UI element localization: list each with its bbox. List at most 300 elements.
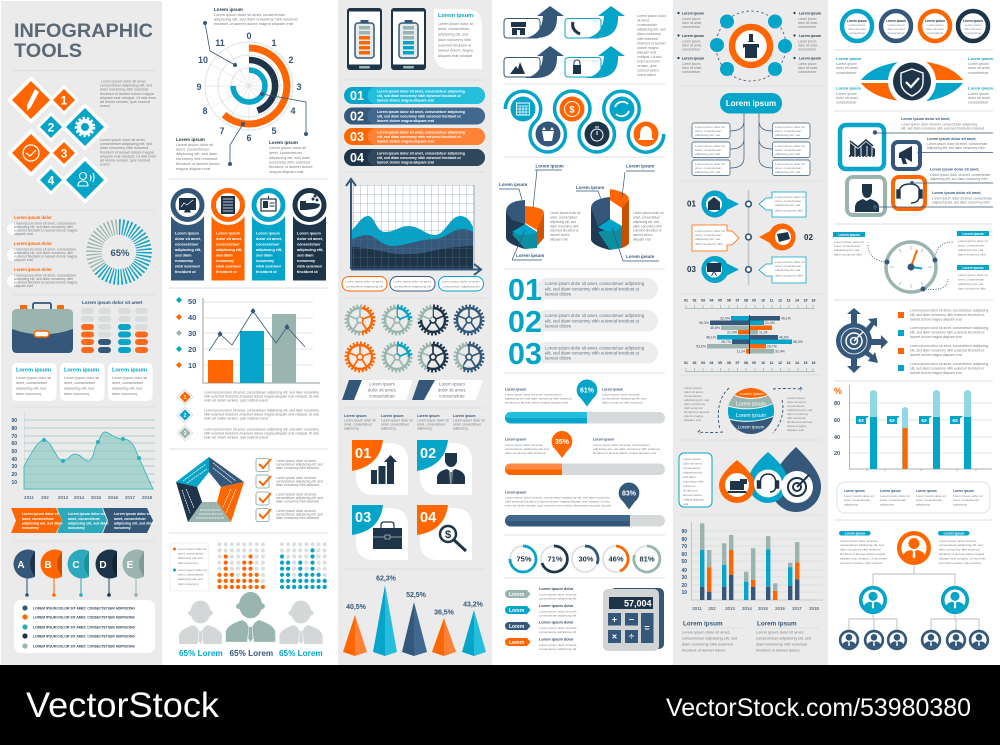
org chart: Lorem ipsum [845,532,865,536]
chevrons: Lorem ipsum dolor sit [114,512,152,516]
stacked bar chart: 2015 [758,606,768,611]
bullet lists: consectetuer [798,25,817,29]
stacked bar chart: 2016 [775,606,785,611]
white cards: Lorem ipsum [64,368,99,374]
diverging bars: 05 [718,298,722,302]
text rings: consectetuer [965,31,981,35]
text rings: consectetuer [888,31,904,35]
checklist: consectetuer adipiscing elit, sed [276,496,323,500]
progress rows: diam nonummy nibh euismod [602,400,643,404]
pie labels: laoreet dolore [550,233,570,237]
chevrons: amet, consectetuer [22,517,55,521]
tree diagram: amet, consectetuer [775,129,801,133]
footer band [0,665,1000,745]
diverging bars: 13 [787,298,790,302]
caption card: Lorem ipsum dolor sit [880,494,910,498]
target compass: laoreet dolore magna aliquam erat [910,371,962,375]
note card: aliquam erat volutpat [438,54,472,58]
people: 65% Lorem [230,649,273,658]
org chart [839,531,988,649]
icon: document [221,196,235,214]
two captions: diam nonummy nibh euismod [682,642,733,646]
panel: column 4 [499,6,667,651]
diverging bars: 14 [795,361,799,365]
growth arrows: volutpat. Ut wisi [637,55,662,59]
list: orange headings: adipiscing elit, sed diam nonummy nibh [14,277,73,281]
timeline steps: Lorem ipsum dolor sit [775,260,805,264]
segmented sphere: tincidunt ut laoreet [684,410,709,414]
dot legend card [170,543,209,591]
pie labels: aliquam erat [550,238,568,242]
white cards: Lorem ipsum dolor sit [64,376,99,380]
icon: headset [897,184,922,203]
radar captions: nonummy nibh euismod [269,160,310,164]
bar and line chart: 50 [188,297,196,306]
org chart: consectetuer adipiscing elit, sed [840,543,884,547]
note card: euismod tincidunt ut [438,44,471,48]
text rings: Lorem ipsum [963,19,983,23]
radar chart: 9 [196,82,202,92]
calculator: × [612,632,617,642]
caption card: adipiscing [844,502,858,506]
four icon cards: Lorem ipsum [297,232,321,236]
diverging bars: 06 [727,298,731,302]
icon: shield [901,69,923,96]
white cards [12,363,152,401]
progress rows: Lorem ipsum [505,388,526,392]
progress rows [505,380,665,526]
white cards: amet, consectetuer [64,381,96,385]
tree diagram: adipiscing elit, sed [775,170,801,174]
four column text: adipiscing [381,426,396,430]
radar captions: Lorem ipsum [176,137,205,142]
panel: column 1: tincidunt ut laoreet dolore magna [100,150,155,154]
numbered list: enim ad minim veniam, quis nostrud exerci [204,436,269,440]
area chart: 2015 [91,495,102,500]
diverging bars: 02 [693,298,696,302]
text rings: Lorem ipsum [927,23,944,27]
timeline steps: 01 [687,200,696,208]
pie labels: Lorem ipsum dolor sit [633,211,664,215]
numbered list: Lorem ipsum dolor sit amet, consectetuer adipiscing elit, sed diam nonummy [204,390,319,394]
eye shield: consectetuer [968,100,989,104]
text rings: dolor sit amet [887,27,905,31]
gears [346,306,483,371]
letter pins A-E: A [17,560,25,571]
two captions: tincidunt ut laoreet dolore [682,648,726,652]
numbered list: Lorem ipsum dolor sit amet, consectetuer adipiscing elit, sed diam nonummy [204,408,319,412]
icon: gear [76,118,94,136]
growth arrows: diam nonummy [637,32,661,36]
radial chart 65% [94,227,144,277]
3D pie left [506,200,544,249]
drops with icons: dolor sit amet, [683,462,703,466]
radar chart: 5 [271,126,277,136]
numbered pills: 02 [350,110,364,124]
icon squares: Lorem ipsum dolor sit amet, consectetuer adipiscing [901,122,977,126]
progress rows: Lorem ipsum dolor sit amet, consectetuer adipiscing elit, sed diam nonummy [505,496,610,500]
tag list: consectetuer adipiscing elit. [539,630,577,634]
chevrons: nonummy [114,526,131,530]
icon: megaphone [899,146,912,164]
clock: diam nonummy nibh [834,252,862,256]
diverging bars: 21,4% [765,321,775,325]
slanted tags: dolor sit amet, [368,388,396,392]
eye shield: Lorem ipsum [968,86,994,90]
four column text: adipiscing [417,426,432,430]
timeline steps: amet, consectetuer [695,233,721,237]
progress rows: consectetuer adipiscing elit, sed [602,396,646,400]
stacked bar chart: 20 [681,583,687,589]
diverging bars: 46,1% [781,316,791,320]
tree diagram: Lorem ipsum dolor sit [775,125,805,129]
icon squares: Lorem ipsum dolor sit amet, consectetuer [932,196,993,200]
phones with batteries [347,8,426,70]
target compass: elit, sed diam nonummy nibh euismod tincidunt ut [910,313,984,317]
bar and line chart: 20 [188,345,196,354]
eye shield: Lorem ipsum [836,86,862,90]
panel: column 1: consectetuer adipiscing elit, sed [100,142,152,146]
list: orange headings: aliquam erat [14,258,33,262]
bullet lists: consectetuer [798,70,817,74]
big numbered rows: Lorem ipsum dolor sit amet, consectetuer adipiscing [545,281,645,286]
numbered pills [344,87,485,166]
org chart: ad minim veniam, quis nostrud [840,561,882,565]
two captions: consectetuer adipiscing elit, sed [682,636,737,640]
area chart: 202 [41,495,49,500]
numbered pills: Lorem ipsum dolor sit amet, consectetuer adipiscing [377,90,465,94]
tag list: Lorem ipsum dolor [539,638,574,642]
text rings [842,11,988,41]
four icon cards: adipiscing elit, [175,248,201,252]
segmented sphere: Lorem ipsum [684,386,702,390]
numbered pills: elit, sed diam nonummy nibh euismod tincidunt ut [377,156,461,160]
clock: amet, consectetuer [958,244,984,248]
title: INFOGRAPHIC [14,21,153,42]
outlined labels [342,276,484,291]
calculator: − [629,614,634,624]
org chart: diam nonummy nibh euismod [939,548,980,552]
growth arrows: nibh euismod [637,37,658,41]
slanted tags: dolor sit amet, [438,388,466,392]
caption card: amet, consectetuer [953,498,979,502]
tag list: consectetuer adipiscing elit. [539,596,577,600]
eye shield: consectetuer [836,100,857,104]
bullet lists: Lorem ipsum [682,62,701,66]
numbered icon tiles [352,440,472,560]
segmented sphere: nibh euismod [787,416,806,420]
caption card: adipiscing [916,502,930,506]
timeline steps: diam nonummy nibh [695,242,723,246]
diverging bars: 11 [770,361,773,365]
white cards: diam nonummy [112,392,137,396]
four icon cards: nibh euismod [297,264,322,268]
legend card: LOREM IPSUM DOLOR SIT AMET, CONSECTETUER ADIPISCING [33,616,135,620]
calculator [603,588,664,651]
segmented sphere: Lorem ipsum [738,424,764,430]
segmented sphere: Lorem ipsum [787,396,805,400]
diverging bars: 01 [684,361,688,365]
radar captions: amet, consectetuer [269,150,303,155]
tag list: Lorem ipsum dolor sit amet, [539,626,577,630]
target compass: elit, sed diam nonummy nibh euismod tincidunt ut [910,366,984,370]
big numbered rows: 01 [508,273,542,307]
segmented sphere: nibh euismod [684,406,703,410]
segmented sphere [684,385,813,436]
numbered pills: elit, sed diam nonummy nibh euismod tincidunt ut [377,94,461,98]
pie labels: laoreet dolore [633,233,653,237]
leader lines [203,21,308,166]
text block: diamonds: diam nonummy nibh euismod [100,88,148,92]
diverging bars: 48,1% [706,336,716,340]
pie labels: adipiscing elit, sed [633,220,659,224]
tag list: consectetuer adipiscing elit. [539,614,577,618]
icon: monitor [179,198,196,212]
thermometer bars: 63 [952,418,958,424]
eye shield: consectetuer [968,71,989,75]
letter pins A-E: E [127,560,134,571]
growth arrows: aliquam erat [637,50,656,54]
segmented sphere: adipiscing elit, sed [787,408,813,412]
four icon cards: consectetuer [256,242,280,246]
numbered list: enim ad minim veniam, quis nostrud exerci [204,398,269,402]
icon squares: adipiscing elit, sed diam nonummy nibh [927,146,985,150]
progress rows: Lorem ipsum dolor sit amet, consectetuer [505,392,562,396]
diverging bars: 11,24 [759,330,768,334]
pie labels: Lorem ipsum [516,253,544,258]
diverging bars: 01 [684,298,688,302]
bullet lists [677,12,821,74]
slanted tags: Lorem ipsum [369,382,395,386]
eye shield: dolor sit amet, [836,96,859,100]
text block: diamonds: ad minim veniam, quis nostrud [100,100,150,104]
four icon cards: Lorem ipsum [256,232,280,236]
bullet lists: Lorem ipsum [798,17,817,21]
text rings: dolor sit amet [848,27,866,31]
area chart: 20 [11,472,17,478]
eye shield [836,56,994,106]
org chart: aliquam erat volutpat. Ut wisi enim [939,556,987,560]
tag list: Lorem ipsum dolor [539,620,574,624]
bullet lists: dolor sit amet, [682,21,702,25]
big numbered rows: laoreet dolore [545,356,572,360]
four column text: Lorem ipsum [417,414,440,418]
icon: businessman [855,184,879,212]
timeline steps: adipiscing elit, sed [695,237,721,241]
bar and line chart [176,297,320,383]
white cards: Lorem ipsum dolor sit [112,376,147,380]
area chart: 2016 [108,495,119,500]
target compass: elit, sed diam nonummy nibh euismod tincidunt ut [910,330,984,334]
icon squares: Lorem ipsum dolor sit amet, [927,137,976,141]
growth arrows: tincidunt ut laoreet [637,42,666,46]
radar chart: 6 [246,133,252,143]
clock: adipiscing elit, sed [834,248,860,252]
two captions: diam nonummy nibh euismod [756,642,807,646]
chevrons: nonummy [22,526,39,530]
diverging bars: 08 [744,298,748,302]
progress rows: tincidunt ut laoreet dolore magna aliquam erat [505,400,568,404]
target compass: laoreet dolore magna aliquam erat [910,335,962,339]
segmented sphere: tincidunt ut laoreet [787,420,812,424]
progress rows: Lorem ipsum dolor sit amet, [505,443,543,447]
checklist: diam nonummy nibh euismod [276,500,319,504]
four icon cards: adipiscing elit, [216,248,242,252]
diverging bars: 04 [710,298,713,302]
timeline steps: adipiscing elit, sed [775,268,801,272]
bullet lists: Lorem ipsum [799,56,821,60]
white cards: adipiscing elit, sed [64,386,94,390]
numbered list: nibh euismod tincidunt ut laoreet dolore magna aliquam erat volutpat. Ut wisi [204,412,319,416]
legend card: LOREM IPSUM DOLOR SIT AMET, CONSECTETUER ADIPISCING [33,626,135,630]
caption card: amet, consectetuer [844,498,870,502]
clock: diam nonummy nibh [958,286,986,290]
progress rows: Lorem ipsum dolor sit amet, consectetuer [593,443,650,447]
org chart: Lorem ipsum dolor sit amet, [939,539,977,543]
letter pins A-E: B [44,560,52,571]
drops with icons: consectetuer [683,466,701,470]
list: orange headings: Lorem ipsum dolor sit amet, consectetuer [14,274,77,278]
clock: amet, consectetuer [834,244,860,248]
list: orange headings: Lorem ipsum dolor [14,215,52,220]
icon squares: Lorem ipsum dolor sit amet, [930,168,979,172]
thermometer bars: 63 [921,418,927,424]
org chart: diam nonummy nibh euismod [840,548,881,552]
panel: column 5 [673,0,828,665]
pie labels: Lorem ipsum [576,185,604,190]
text rings: Lorem ipsum [965,23,982,27]
four icon cards: consectetuer [216,242,240,246]
icon: phone [573,22,580,34]
caption card: Lorem ipsum [880,489,901,493]
caption card: adipiscing [880,502,894,506]
big numbered rows: Lorem ipsum dolor sit amet, consectetuer adipiscing [545,313,645,318]
caption card: adipiscing [953,502,967,506]
four column text: Lorem ipsum dolor sit [453,418,485,422]
caption card [837,482,990,513]
stacked bar chart: 70 [681,544,687,550]
numbered pills: laoreet dolore magna aliquam erat [377,140,435,144]
note card: Lorem ipsum dolor sit [438,22,473,26]
four icon cards: tincidunt ut [216,270,237,274]
area chart: 50 [11,449,17,455]
title: TOOLS [14,41,82,62]
progress rows: diam nonummy nibh euismod [505,451,546,455]
white cards: adipiscing elit, sed [112,386,142,390]
diverging bars: 32,4% [775,350,785,354]
legend card: LOREM IPSUM DOLOR SIT AMET, CONSECTETUER ADIPISCING [33,606,135,610]
outlined labels: consectetuer adipiscing elit [346,284,383,288]
four icon cards: tincidunt ut [297,270,318,274]
org chart: consectetuer adipiscing elit, sed [939,543,983,547]
two captions: tincidunt ut laoreet dolore [756,648,800,652]
radar captions: Lorem ipsum [214,7,243,12]
dot legend card: Lorem ipsum dolor sit [178,568,207,572]
white cards: amet, consectetuer [112,381,144,385]
two captions: Lorem ipsum [757,620,797,628]
diverging bars: 53,6% [696,344,706,348]
icon squares: Lorem ipsum dolor sit amet, [932,191,981,195]
timeline steps: diam nonummy nibh [775,274,803,278]
diverging bars: 59,3% [699,321,709,325]
diverging bars: 26,7% [721,340,731,344]
four column text: Lorem ipsum [381,414,404,418]
area chart: 2014 [74,495,85,500]
note card: amet, consectetuer [438,27,470,31]
panel: column 1: diam nonummy nibh euismod [100,146,148,150]
note card: adipiscing elit, sed [438,32,468,36]
text rings: Lorem ipsum [888,23,905,27]
icon squares: Lorem ipsum dolor sit amet, [901,117,950,121]
segmented sphere: diam nonummy [787,412,809,416]
target compass: Lorem ipsum dolor sit amet, consectetuer adipiscing [910,362,988,366]
clock: Lorem ipsum dolor sit [834,240,864,244]
caption card: Lorem ipsum [953,489,974,493]
thermometer bars [834,385,992,471]
tag list: Lorem [509,608,525,614]
growth arrows: nostrud exerci [637,68,659,72]
clock: Lorem ipsum [838,233,860,237]
diverging bars: 46,6% [779,336,789,340]
numbered list: 3 [184,431,187,437]
dot legend card: amet, consectetuer [178,552,204,556]
tree diagram: Lorem ipsum dolor sit [695,144,725,148]
numbered pills: Lorem ipsum dolor sit amet, consectetuer adipiscing [377,110,465,114]
bullet lists: Lorem ipsum [682,56,704,60]
two captions: Lorem ipsum [683,620,723,628]
diverging bars: 11 [770,298,773,302]
eye shield: consectetuer [836,71,857,75]
chevrons [11,508,154,533]
growth arrows: sit amet, [637,18,650,22]
thermometer bars: % [834,386,842,396]
clock: diam nonummy nibh [958,252,986,256]
bullet lists: dolor sit amet, [682,66,702,70]
numbered icon tiles: 01 [355,446,371,462]
eye shield: dolor sit amet, [968,66,991,70]
icon: bucket [542,127,554,141]
diverging bars: 10 [761,361,765,365]
numbered list: 2 [184,413,187,419]
chevrons: adipiscing elit, sed diam [114,522,154,526]
diverging bars: 11,24 [736,350,745,354]
text block: diamonds: Lorem ipsum dolor sit amet, [101,80,146,84]
icon: sync [615,102,629,116]
note card: laoreet dolore magna [438,48,474,52]
area chart: 80 [11,426,17,432]
pie labels: Lorem ipsum [626,164,654,168]
four column text: Lorem ipsum dolor sit [381,418,413,422]
list: orange headings: Lorem ipsum dolor [14,267,52,272]
diverging bars: 07 [736,298,739,302]
diverging bars: 12 [778,298,782,302]
org chart: tincidunt ut laoreet dolore magna [939,552,984,556]
segmented sphere: diam nonummy [684,402,706,406]
chevrons: adipiscing elit, sed diam [22,522,62,526]
leader lines [873,130,993,209]
caption card: amet, consectetuer [916,498,942,502]
thermometer bars: 20 [834,451,840,457]
radar captions: Lorem ipsum dolor sit [176,142,214,147]
diverging bars: 26,7% [767,344,777,348]
list: orange headings: adipiscing elit, sed diam nonummy nibh [14,225,73,229]
bullet lists: Lorem ipsum [798,40,817,44]
bullet lists: Lorem ipsum [682,34,704,38]
thermometer bars: 60 [834,418,840,424]
text block: diamonds: aliquam erat volutpat. Ut wisi enim [100,96,156,100]
diamond tiles: 4 [48,174,55,188]
stacked bar chart [681,522,823,611]
